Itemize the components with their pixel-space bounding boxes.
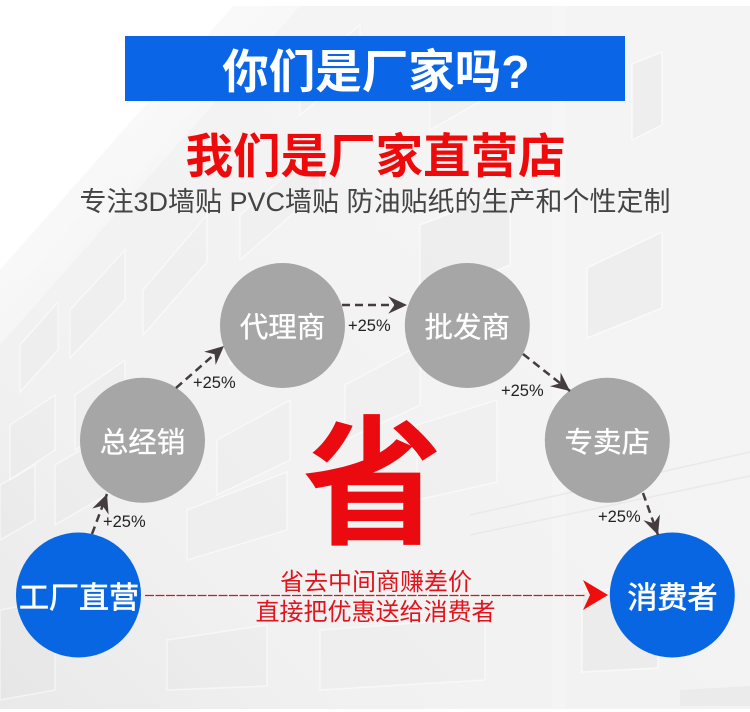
arrow: factory to distributor bbox=[92, 494, 107, 534]
red dashed arrow: factory to consumer bbox=[145, 580, 608, 610]
node: agent bbox=[220, 263, 345, 388]
markup label 4: +25% bbox=[501, 382, 544, 400]
savings caption: 省去中间商赚差价 bbox=[280, 569, 472, 596]
subtitle: 专注3D墙贴 PVC墙贴 防油贴纸的生产和个性定制 bbox=[79, 187, 671, 217]
arrow: wholesaler to store bbox=[523, 354, 570, 391]
savings caption bbox=[256, 569, 496, 626]
red heading: 我们是厂家直营店 bbox=[186, 131, 566, 184]
savings caption: 直接把优惠送给消费者 bbox=[256, 599, 496, 626]
node: wholesaler bbox=[405, 263, 530, 388]
node: general distributor: 总经销 bbox=[100, 427, 185, 459]
arrow: agent to wholesaler bbox=[342, 304, 407, 306]
arrow: store to consumer bbox=[643, 493, 658, 535]
markup label 3: +25% bbox=[348, 317, 391, 335]
node: wholesaler: 批发商 bbox=[425, 312, 510, 344]
central character: 省 bbox=[302, 406, 443, 563]
title banner bbox=[125, 36, 625, 101]
markup label 5: +25% bbox=[598, 508, 641, 526]
node: consumer bbox=[610, 532, 735, 658]
node: factory direct bbox=[16, 532, 141, 658]
arrow: distributor to agent bbox=[176, 346, 224, 388]
node: general distributor bbox=[80, 378, 205, 503]
node: specialty store bbox=[545, 378, 670, 503]
markup label 1: +25% bbox=[103, 513, 146, 531]
node: agent: 代理商 bbox=[240, 312, 325, 344]
node: specialty store: 专卖店 bbox=[565, 427, 650, 459]
banner heading: 你们是厂家吗? bbox=[222, 46, 530, 98]
node: factory direct: 工厂直营 bbox=[19, 582, 139, 615]
markup label 2: +25% bbox=[193, 374, 236, 392]
node: consumer: 消费者 bbox=[628, 582, 718, 615]
